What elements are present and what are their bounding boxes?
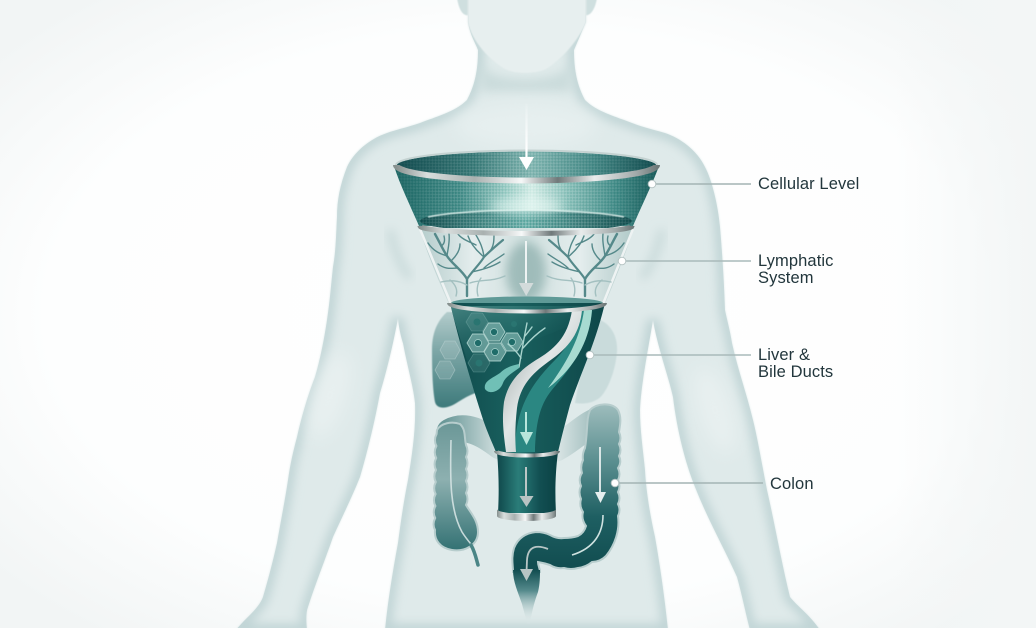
cylinder [497, 452, 558, 513]
transverse colon left [450, 429, 500, 446]
label: lymphatic system: System [758, 269, 814, 287]
descending and sigmoid colon [512, 404, 620, 624]
pool at base [451, 296, 603, 310]
glass cone [419, 228, 634, 304]
channel highlight [548, 310, 592, 388]
label: lymphatic system [618, 252, 834, 287]
hexagon cells [466, 313, 523, 372]
top opening [395, 152, 657, 180]
ears [457, 0, 597, 15]
tier 1: cellular level [394, 151, 659, 232]
label: cellular level: Cellular Level [758, 175, 859, 193]
transverse colon right [556, 420, 603, 448]
dark centre shading [506, 242, 546, 302]
top rim back [396, 151, 657, 165]
liver left lobe [432, 312, 480, 408]
ascending colon [434, 423, 478, 550]
funnel [394, 104, 659, 521]
arrow [519, 241, 534, 296]
colon flow arrow [599, 447, 601, 494]
human body silhouette [236, 0, 820, 628]
colon [434, 404, 620, 624]
torso and arms [236, 0, 820, 628]
bile droplet [485, 364, 519, 392]
liver behind funnel [432, 312, 617, 408]
liver right lobe [575, 320, 617, 404]
centre glow [490, 198, 562, 214]
liver cells [435, 341, 460, 379]
rim 4 [496, 451, 558, 456]
branching vessels left [428, 234, 505, 296]
teal channel [515, 310, 592, 452]
entry arrow [519, 104, 534, 170]
rim 2 [420, 226, 632, 233]
tier 2: lymphatic system [419, 226, 634, 310]
colon highlight [572, 515, 603, 555]
sprout [508, 323, 545, 367]
tier 4: colon tube [496, 451, 558, 521]
rectum [513, 570, 540, 624]
mesh band [394, 166, 659, 226]
label: liver and bile ducts: Bile Ducts [758, 363, 833, 381]
glare line [428, 210, 624, 217]
label: colon [611, 475, 814, 493]
dark cone [450, 303, 605, 452]
cone inner details [450, 306, 600, 452]
top rim front [396, 165, 657, 180]
base ring [497, 509, 556, 521]
rim 3 [449, 303, 605, 312]
sigmoid arrow [526, 547, 548, 572]
label: liver and bile ducts [586, 346, 833, 381]
silver bile duct [503, 310, 582, 452]
label: lymphatic system: Lymphatic [758, 252, 834, 270]
label: liver and bile ducts: Liver & [758, 346, 810, 364]
lower opening [420, 210, 632, 232]
inner arrow [520, 412, 533, 445]
head [468, 0, 586, 73]
body shading [236, 0, 820, 628]
branching vessels right [547, 234, 624, 296]
appendix [471, 545, 478, 565]
label: cellular level [648, 175, 859, 193]
arrow [520, 467, 534, 507]
glass edges [420, 229, 633, 304]
tier 3: liver and bile ducts [449, 303, 605, 452]
label: colon: Colon [770, 475, 814, 493]
